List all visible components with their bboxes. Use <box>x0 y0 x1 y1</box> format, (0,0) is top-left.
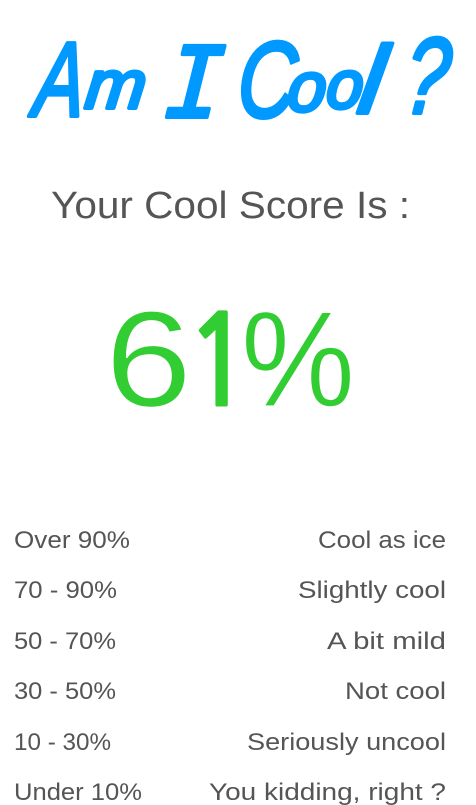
title: o <box>284 47 331 126</box>
row: 70 - 90%: 70 - 90% <box>14 577 117 604</box>
score: 61%: 1 <box>184 300 254 425</box>
title: ? <box>400 15 456 136</box>
title: m <box>82 47 150 123</box>
row: 30 - 50%: 30 - 50% <box>14 678 116 705</box>
title: o <box>323 47 367 123</box>
row: 50 - 70% <box>14 628 446 655</box>
row: 30 - 50%: Not cool <box>345 678 446 705</box>
title: I <box>160 28 228 150</box>
score scale table <box>14 527 446 805</box>
row: over 90% <box>14 527 446 554</box>
title: l <box>353 27 395 134</box>
row: 70 - 90%: Slightly cool <box>298 577 446 604</box>
subheading: your cool score: Your Cool Score Is : <box>51 185 410 227</box>
score: 61%: 6 <box>105 283 192 435</box>
title <box>25 15 456 150</box>
row: 70 - 90% <box>14 577 446 604</box>
row: 10 - 30% <box>14 729 446 756</box>
row: 10 - 30%: Seriously uncool <box>247 729 446 756</box>
score: 61%: % <box>241 283 355 435</box>
row: 50 - 70%: A bit mild <box>327 628 446 655</box>
row: 50 - 70%: 50 - 70% <box>14 628 116 655</box>
row: 10 - 30%: 10 - 30% <box>14 729 111 756</box>
title: C <box>234 19 302 140</box>
row: over 90%: Cool as ice <box>318 527 446 554</box>
row: under 10% <box>14 779 446 805</box>
score: 61% <box>105 283 355 435</box>
row: over 90%: Over 90% <box>14 527 130 554</box>
row: 30 - 50% <box>14 678 446 705</box>
title: A <box>25 20 92 139</box>
